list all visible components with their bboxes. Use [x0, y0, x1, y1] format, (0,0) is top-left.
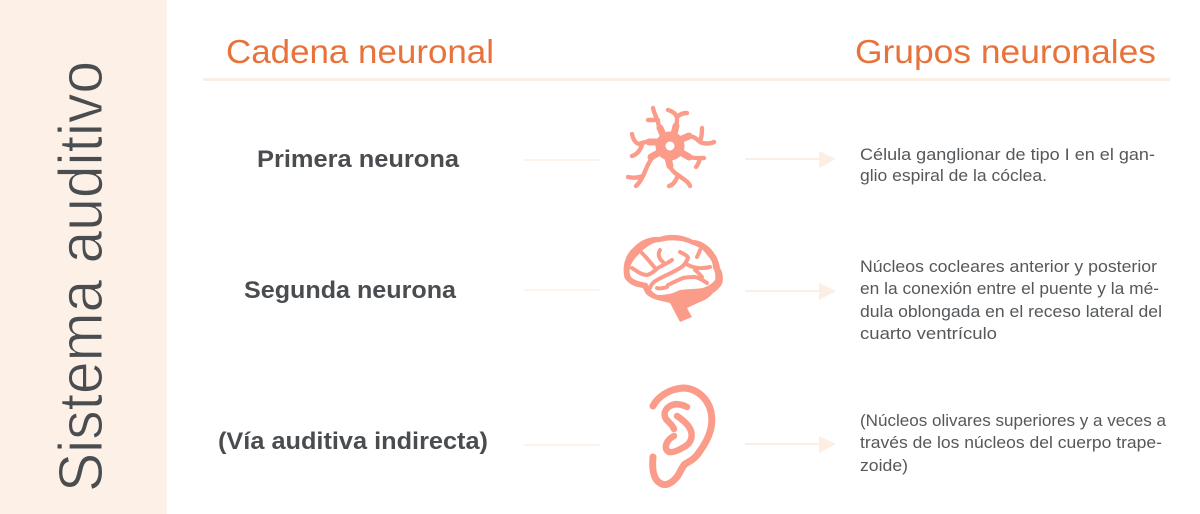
arrow: row 3 [745, 436, 836, 453]
text: description 1: glio espiral de la cóclea. [860, 167, 1047, 185]
text: description 3: zoide) [860, 457, 908, 475]
text: description 2: dula oblongada en el receso lateral del [860, 303, 1162, 321]
text: description 3: (Núcleos olivares superiores y a veces a [860, 412, 1167, 430]
panel: side band [0, 0, 167, 514]
icon: ear [653, 388, 712, 485]
heading: Cadena neuronal: Cadena neuronal [226, 33, 494, 70]
arrow: row 1 [745, 151, 836, 168]
text: description 2: en la conexión entre el puente y la mé- [860, 280, 1159, 298]
label: Vía auditiva indirecta: (Vía auditiva indirecta) [218, 428, 488, 455]
label: Primera neurona: Primera neurona [257, 146, 460, 173]
line: row 3 left [524, 444, 600, 446]
line: row 1 left [524, 159, 600, 161]
text: description 1 [860, 146, 1155, 185]
side title: Sistema auditivo [47, 61, 116, 492]
icon: brain [624, 235, 723, 322]
icon: neuron [628, 108, 714, 186]
arrow: row 2 [745, 283, 836, 300]
text: description 2 [860, 258, 1162, 343]
text: description 3: través de los núcleos del cuerpo trape- [860, 434, 1162, 452]
text: description 2: cuarto ventrículo [860, 325, 997, 343]
text: description 2: Núcleos cocleares anterior y posterior [860, 258, 1158, 276]
line: row 2 left [524, 289, 600, 291]
heading: Grupos neuronales: Grupos neuronales [855, 33, 1156, 70]
text: description 1: Célula ganglionar de tipo I en el gan- [860, 146, 1155, 164]
text: description 3 [860, 412, 1167, 475]
label: Segunda neurona: Segunda neurona [244, 277, 457, 304]
